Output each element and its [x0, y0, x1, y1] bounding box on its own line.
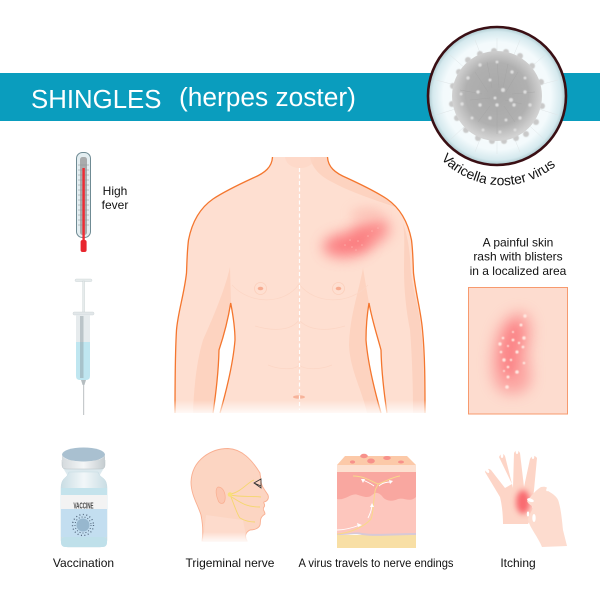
title: SHINGLES [31, 86, 161, 114]
right hand [527, 487, 567, 547]
icon: thermometer [76, 152, 90, 252]
nerve branches [230, 480, 261, 522]
icon: syringe [73, 279, 94, 415]
chest and abdomen muscle lines [232, 284, 368, 372]
vial label text: VACCINE [74, 502, 94, 510]
icon: skin cross-section [337, 454, 416, 548]
header banner [0, 73, 600, 121]
vaccination label: Vaccination [53, 556, 114, 570]
eye [254, 479, 261, 488]
trigeminal label: Trigeminal nerve [186, 556, 275, 570]
blisters [498, 314, 527, 389]
arm and side shading [193, 157, 424, 413]
virus on vial [72, 514, 94, 536]
rash label: A painful skin [483, 236, 553, 250]
rash label: rash with blisters [473, 250, 563, 264]
dermatome midline [298, 168, 300, 410]
fever label: fever [102, 198, 128, 212]
icon: itching hands [485, 449, 567, 547]
icon: vaccine vial [61, 448, 107, 547]
fever label: High [103, 184, 127, 198]
shoulder rash [322, 206, 393, 259]
subtitle: (herpes zoster) [179, 82, 356, 112]
nerve path [337, 476, 400, 534]
neck shadow [285, 157, 315, 168]
nipples [258, 287, 341, 290]
panel: rash close-up [468, 288, 568, 414]
orange outline [175, 157, 425, 413]
white travel arrows [337, 480, 391, 530]
icon: head with trigeminal nerve [191, 448, 268, 543]
navel [293, 395, 305, 399]
blisters on skin [350, 454, 404, 464]
bottom fade [170, 400, 430, 416]
ear [216, 487, 225, 503]
nerve endings label: A virus travels to nerve endings [298, 556, 454, 570]
body torso illustration [170, 157, 430, 416]
icon: varicella zoster virus lens [428, 27, 566, 165]
rash label: in a localized area [470, 264, 567, 278]
itching label: Itching [500, 556, 536, 570]
red itch spot [516, 490, 530, 514]
left hand with tapered fingers [485, 450, 537, 524]
virus label: Varicella zoster virus [444, 152, 555, 186]
